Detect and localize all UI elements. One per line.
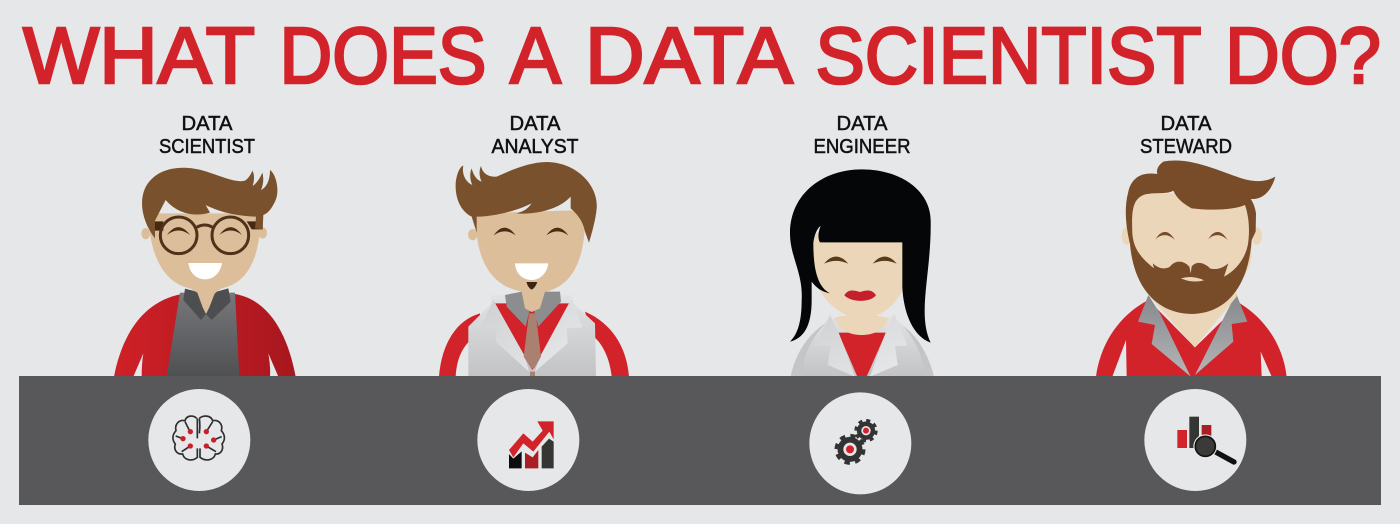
character: data scientist (114, 168, 296, 377)
icon: rising chart (477, 389, 579, 491)
panel: dark band (19, 376, 1381, 505)
icon: bars and magnifier (1144, 389, 1246, 491)
label: data analyst: DATA (510, 113, 561, 135)
label: data analyst: ANALYST (492, 136, 578, 158)
label: data engineer: ENGINEER (814, 136, 910, 158)
character: data analyst (439, 162, 629, 377)
title: A (510, 11, 562, 100)
title: DO? (1225, 11, 1381, 100)
label: data analyst (492, 113, 578, 158)
label: data engineer: DATA (836, 113, 888, 135)
title: DATA (585, 11, 794, 100)
label: data scientist: DATA (182, 113, 233, 135)
title (23, 11, 1381, 100)
label: data steward (1140, 113, 1232, 158)
title: DOES (280, 11, 486, 100)
label: data scientist (159, 113, 255, 158)
character: data engineer (790, 169, 934, 377)
icon: brain (148, 389, 250, 491)
title: WHAT (23, 11, 255, 100)
character: data steward (1096, 160, 1287, 377)
label: data steward: STEWARD (1140, 136, 1232, 158)
title: SCIENTIST (816, 11, 1202, 100)
label: data engineer (814, 113, 910, 158)
label: data scientist: SCIENTIST (159, 136, 255, 158)
label: data steward: DATA (1160, 113, 1212, 135)
icon: gears (809, 392, 911, 494)
